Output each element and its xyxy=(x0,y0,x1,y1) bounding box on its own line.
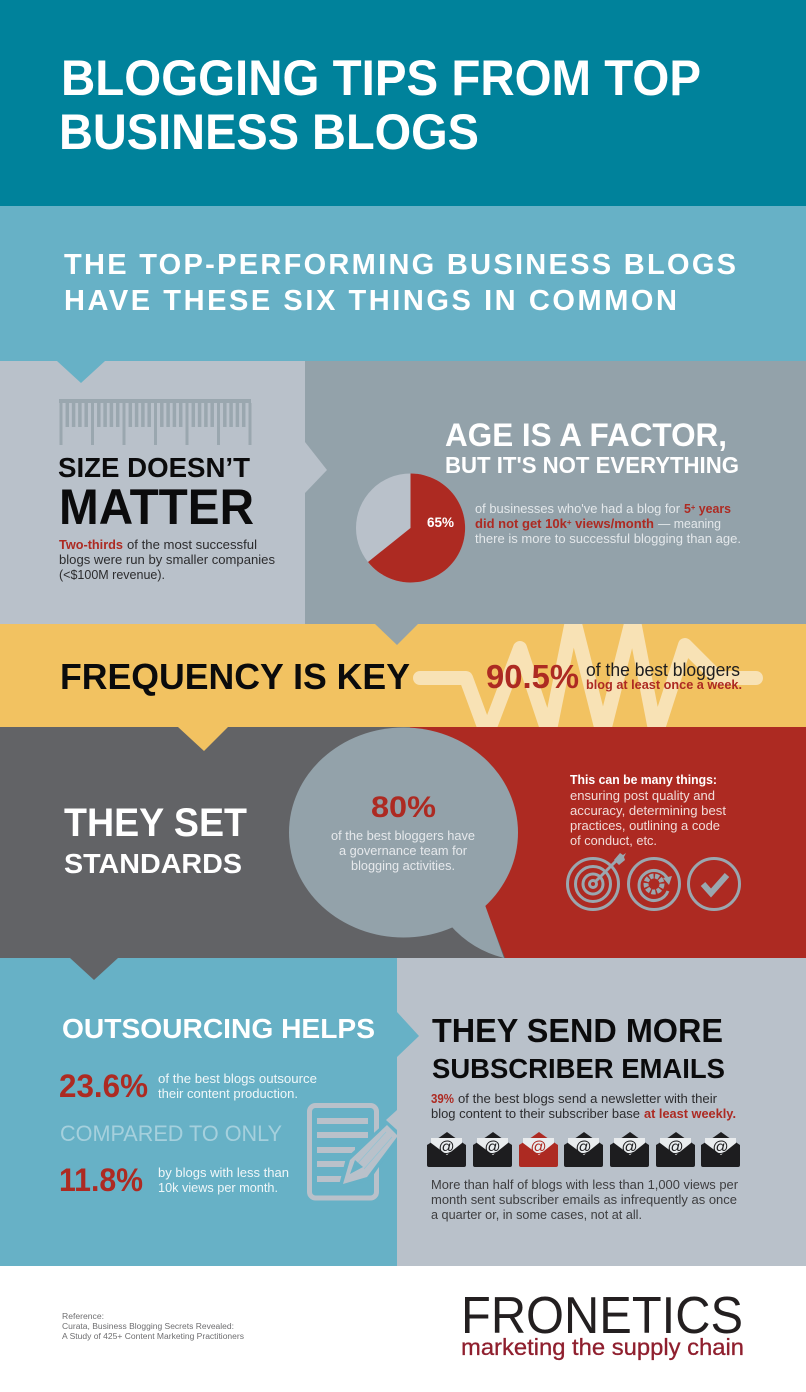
statistic: 11.8%: 11.8% xyxy=(59,1162,143,1198)
text: newsletter statistic xyxy=(431,1091,736,1121)
heading: age is a factor: BUT IT'S NOT EVERYTHING xyxy=(445,452,739,478)
heading: they set standards xyxy=(64,801,247,879)
pie chart: 65% xyxy=(356,473,465,582)
text: age statistic: did not get 10k xyxy=(475,516,567,531)
panel: frequency is key xyxy=(0,624,806,727)
icon: envelope 4 xyxy=(564,1132,603,1167)
icon: envelope 1: @ xyxy=(438,1139,455,1156)
title: BLOGGING TIPS FROM TOP xyxy=(61,50,701,106)
panel: they set standards xyxy=(0,727,806,958)
panel: they send more subscriber emails xyxy=(397,958,806,1266)
text: comparison description xyxy=(158,1165,289,1195)
text: age statistic: 5 xyxy=(684,501,691,516)
text: newsletter statistic: 39% xyxy=(431,1091,454,1106)
panel: footer xyxy=(0,1266,806,1392)
logo: fronetics: FRONETICS xyxy=(461,1287,743,1345)
panel: title banner xyxy=(0,0,806,206)
text: frequency statistic: of the best bloggers xyxy=(586,660,740,680)
text: outsource description: of the best blogs outsource xyxy=(158,1071,317,1086)
subtitle heading xyxy=(64,249,736,317)
text: size statistic xyxy=(59,537,275,582)
heading: age is a factor xyxy=(445,417,739,478)
text: age statistic xyxy=(475,501,741,546)
text: age statistic: of businesses who've had a blog for xyxy=(475,501,681,516)
text: many things xyxy=(570,772,726,848)
text: size statistic: (<$100M revenue). xyxy=(59,567,165,582)
icon: envelope 5 xyxy=(610,1132,649,1167)
heading: frequency is key: FREQUENCY IS KEY xyxy=(60,656,410,697)
speech bubble: 80%: of the best bloggers have xyxy=(331,829,475,843)
text: outsource description: their content production. xyxy=(158,1086,298,1101)
text: age statistic: years xyxy=(695,501,731,516)
speech bubble: 80%: 80% xyxy=(371,791,436,824)
text: age statistic: there is more to successful blogging than age. xyxy=(475,531,741,546)
icon: envelope 2 xyxy=(473,1132,512,1167)
pie chart: 65%: 65% xyxy=(427,514,455,530)
text: infrequent emails: month sent subscriber emails as infrequently as once xyxy=(431,1192,737,1207)
text: age statistic: — meaning xyxy=(658,516,721,531)
icon: document and pencil xyxy=(310,1106,397,1198)
panel: size doesn't matter xyxy=(0,361,327,624)
text: size statistic: Two-thirds xyxy=(59,537,123,552)
text: age statistic: + xyxy=(567,518,572,527)
icon: envelope 6: @ xyxy=(667,1139,684,1156)
text: reference: A Study of 425+ Content Marketing Practitioners xyxy=(62,1332,244,1341)
text: many things: This can be many things: xyxy=(570,772,717,787)
icon: envelope 2: @ xyxy=(484,1139,501,1156)
text: size statistic: of the most successful xyxy=(127,537,257,552)
icon: target xyxy=(568,853,626,910)
text: many things: accuracy, determining best xyxy=(570,803,726,818)
icon row: seven email envelopes xyxy=(427,1132,740,1167)
icon: envelope 7 xyxy=(701,1132,740,1167)
chart: heartbeat line xyxy=(420,616,756,735)
text: reference: Curata, Business Blogging Secrets Revealed: xyxy=(62,1322,234,1331)
title xyxy=(59,50,701,160)
panel: age is a factor xyxy=(305,361,806,624)
icon: envelope 1 xyxy=(427,1132,466,1167)
text: newsletter statistic: at least weekly. xyxy=(644,1106,736,1121)
text: many things: of conduct, etc. xyxy=(570,833,657,848)
title: BUSINESS BLOGS xyxy=(59,104,479,160)
text: infrequent emails xyxy=(431,1177,739,1222)
heading: subscriber emails: SUBSCRIBER EMAILS xyxy=(432,1053,725,1084)
speech bubble: 80%: blogging activities. xyxy=(351,859,455,873)
speech bubble: 80%: a governance team for xyxy=(339,844,467,858)
icon: envelope 7: @ xyxy=(712,1139,729,1156)
icon: envelope 3 highlighted xyxy=(519,1132,558,1167)
text: frequency statistic xyxy=(586,660,742,692)
text: reference xyxy=(62,1312,244,1341)
text: compared to only: COMPARED TO ONLY xyxy=(60,1121,282,1146)
statistic: 23.6%: 23.6% xyxy=(59,1068,148,1104)
text: outsource description xyxy=(158,1071,317,1101)
text: many things: ensuring post quality and xyxy=(570,788,715,803)
speech bubble: 80% xyxy=(289,728,518,958)
text: newsletter statistic: of the best blogs send a newsletter with their xyxy=(458,1091,718,1106)
text: reference: Reference: xyxy=(62,1312,104,1321)
text: size statistic: blogs were run by smaller companies xyxy=(59,552,275,567)
icon: envelope 5: @ xyxy=(621,1139,638,1156)
text: age statistic: + xyxy=(691,503,696,512)
text: frequency statistic: blog at least once a week. xyxy=(586,677,742,692)
icon: ruler xyxy=(59,399,251,445)
text: comparison description: 10k views per month. xyxy=(158,1180,278,1195)
heading: subscriber emails xyxy=(432,1012,725,1084)
text: infrequent emails: a quarter or, in some cases, not at all. xyxy=(431,1207,642,1222)
text: comparison description: by blogs with less than xyxy=(158,1165,289,1180)
panel: subtitle banner xyxy=(0,206,806,361)
heading: size doesn't matter: SIZE DOESN’T xyxy=(58,452,250,483)
heading: size doesn't matter xyxy=(58,452,254,535)
text: age statistic: views/month xyxy=(572,516,654,531)
icon: envelope 6 xyxy=(656,1132,695,1167)
icon: envelope 4: @ xyxy=(575,1139,592,1156)
subtitle heading: THE TOP-PERFORMING BUSINESS BLOGS xyxy=(64,249,736,281)
text: infrequent emails: More than half of blogs with less than 1,000 views per xyxy=(431,1177,739,1192)
heading: size doesn't matter: MATTER xyxy=(59,479,254,535)
icon: check mark xyxy=(688,858,740,910)
subtitle heading: HAVE THESE SIX THINGS IN COMMON xyxy=(64,285,677,317)
text: many things: practices, outlining a code xyxy=(570,818,720,833)
logo: fronetics: marketing the supply chain xyxy=(461,1334,744,1360)
icon: envelope 3 highlighted: @ xyxy=(530,1139,547,1156)
heading: they set standards: STANDARDS xyxy=(64,848,242,879)
icon: gear cycle xyxy=(628,858,680,910)
heading: outsourcing helps: OUTSOURCING HELPS xyxy=(62,1013,375,1044)
heading: age is a factor: AGE IS A FACTOR, xyxy=(445,417,727,453)
statistic: 90.5%: 90.5% xyxy=(486,658,579,695)
panel: outsourcing helps xyxy=(0,958,419,1266)
heading: they set standards: THEY SET xyxy=(64,801,247,845)
text: newsletter statistic: blog content to their subscriber base xyxy=(431,1106,640,1121)
heading: subscriber emails: THEY SEND MORE xyxy=(432,1012,723,1049)
